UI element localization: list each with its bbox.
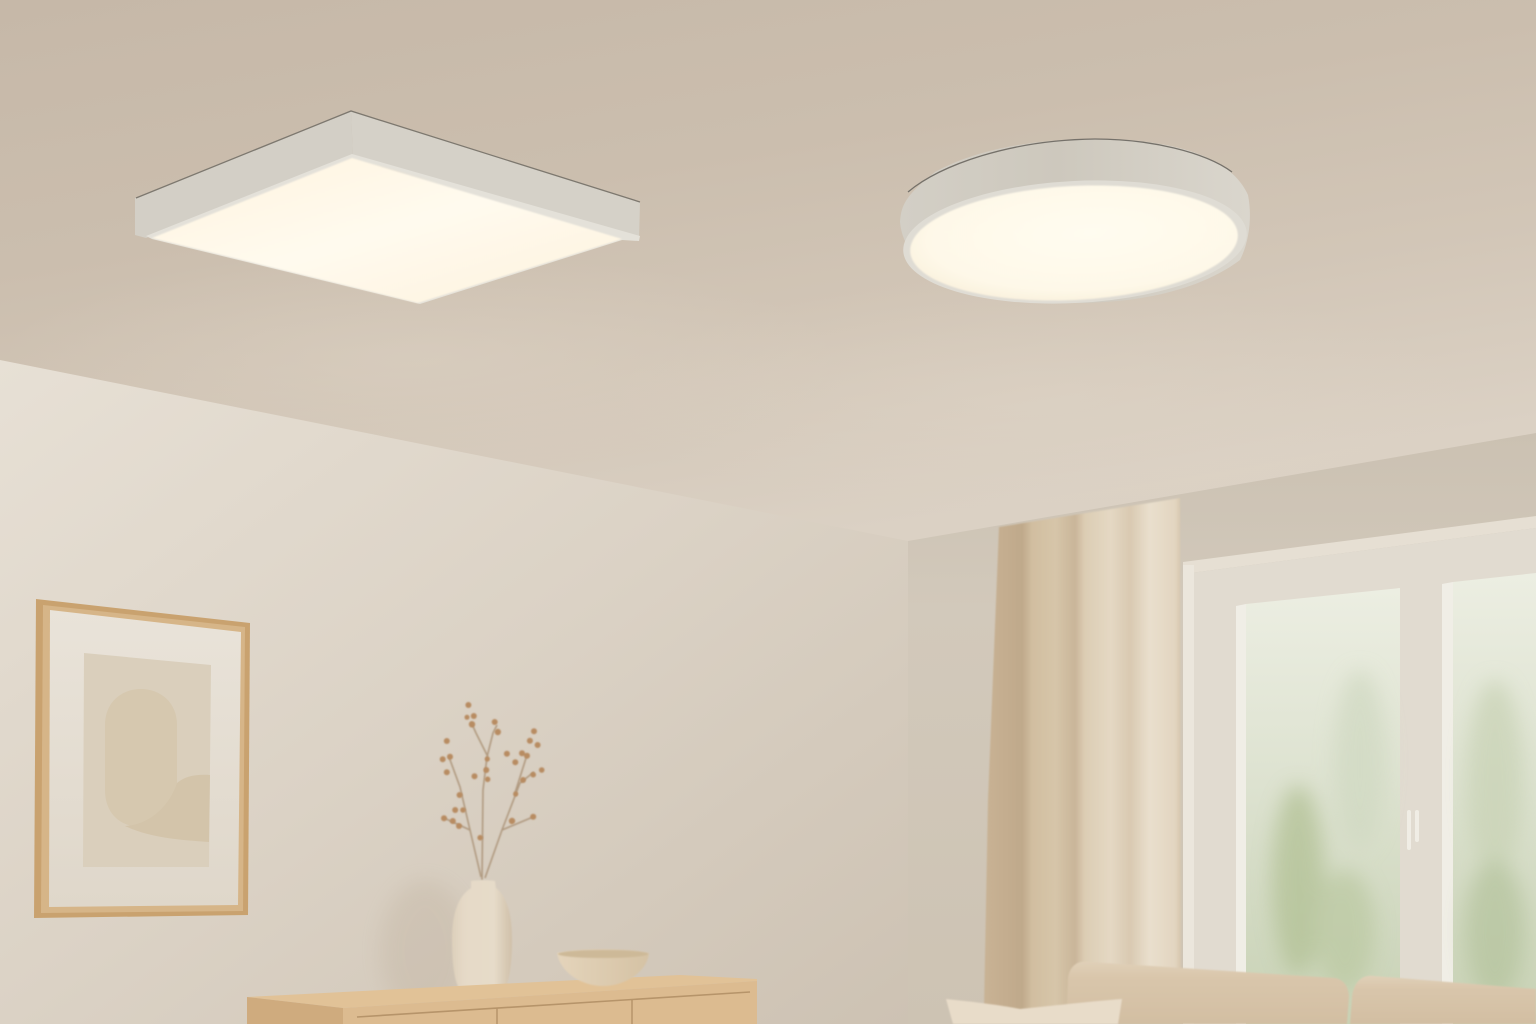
- sofa right cushion: [1350, 976, 1536, 1024]
- curtain: [984, 498, 1181, 1010]
- window header strip: [1183, 516, 1536, 574]
- window reveal left: [1236, 604, 1246, 1024]
- window handle: [1407, 810, 1419, 850]
- window reveal right: [1442, 582, 1453, 1024]
- branches: [444, 722, 534, 880]
- square light: luminous panel: [152, 158, 622, 303]
- round light: luminous panel: [907, 177, 1241, 309]
- square light: top edge line: [136, 111, 640, 202]
- round light: rim ring: [900, 172, 1250, 312]
- art print: [83, 653, 211, 867]
- round light: outer body: [900, 139, 1250, 303]
- round light: top edge line: [908, 139, 1232, 192]
- wall shadow behind vase: [380, 880, 470, 1020]
- sideboard front: [343, 981, 757, 1024]
- picture frame: [34, 599, 250, 918]
- sideboard side: [247, 997, 343, 1024]
- art shape: arch: [105, 689, 177, 827]
- window pane right: [1453, 573, 1536, 1024]
- round ceiling light: [900, 139, 1250, 312]
- sideboard recess line: [357, 992, 750, 1017]
- sofa left cushion: [1066, 962, 1349, 1024]
- sideboard: [247, 975, 757, 1024]
- framed art: [34, 599, 250, 918]
- square light: inner lip: [146, 154, 640, 304]
- right wall: [908, 433, 1536, 1024]
- picture mat: [49, 610, 241, 907]
- foliage outside: [1272, 670, 1525, 1000]
- left wall: [0, 360, 908, 1024]
- art shape: hill: [125, 775, 210, 842]
- bowl: [557, 949, 649, 986]
- window frame: [1183, 528, 1536, 1024]
- throw pillow: [946, 999, 1122, 1024]
- buds: [440, 702, 544, 840]
- square light: frame faces: [135, 111, 353, 238]
- ceiling: [0, 0, 1536, 560]
- sideboard top: [247, 975, 757, 1008]
- window: [1183, 516, 1536, 1024]
- window pane left: [1246, 588, 1400, 1024]
- square ceiling light: [135, 111, 640, 304]
- sofa: [946, 962, 1536, 1024]
- vase with branches: [440, 702, 544, 992]
- vase: [452, 880, 512, 992]
